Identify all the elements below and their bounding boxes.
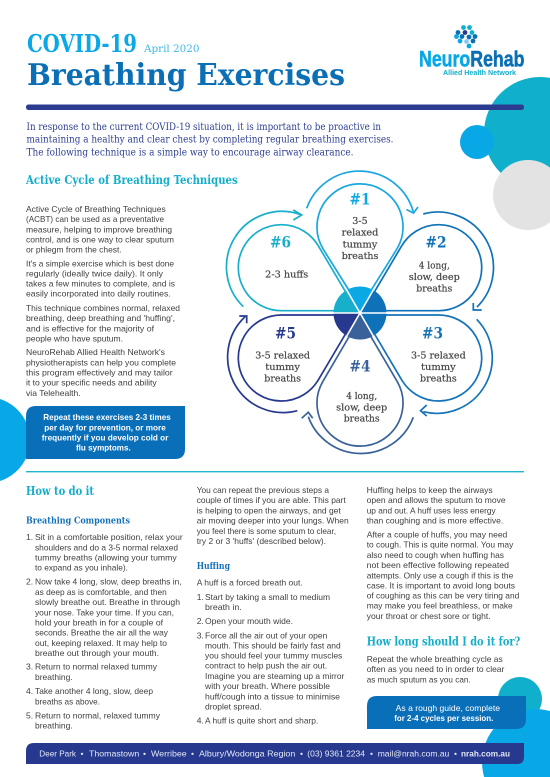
text block: repeat steps: You can repeat the previous steps a (197, 485, 329, 495)
petal 3 (363, 315, 482, 401)
list: huffing steps: Start by taking a small to medium (205, 592, 330, 602)
intro text: The following technique is a simple way to encourage airway clearance. (26, 146, 354, 158)
centre circle (333, 286, 387, 340)
list: huffing steps: 1. (197, 592, 204, 602)
petal 5: 3-5 relaxed (255, 350, 310, 361)
text block: huffing explanation: attempts. Only use a cough if this is the (367, 570, 514, 580)
petal 5: tummy (265, 362, 301, 373)
petal 2: #2 (426, 233, 446, 252)
text block: ACBT description (26, 204, 180, 398)
title: Breathing Exercises (27, 58, 345, 93)
petal 6 (238, 225, 357, 311)
text block: huffing explanation: of coughing as this can be very tiring and (367, 591, 520, 601)
footer bar: • (191, 749, 194, 759)
footer bar: (03) 9361 2234 (307, 749, 365, 759)
petal 4: breaths (344, 414, 380, 425)
petal 1: 3-5 (352, 216, 368, 227)
decorative circles: top right (460, 77, 550, 230)
list: breathing components: 1. (26, 532, 33, 542)
petal 1 (317, 184, 403, 308)
text block: repeat cycle: often as you need to in order to clear (367, 664, 504, 674)
text block: huffing explanation: also need to cough when huffing has (367, 550, 504, 560)
list: breathing components: Sit in a comfortable position, relax your (35, 532, 183, 542)
text block: repeat steps: air moving deeper into your lungs. When (197, 515, 349, 525)
arrow: 5 to 6 (228, 316, 297, 413)
list: huffing steps: 4. (197, 715, 204, 725)
title (27, 29, 345, 93)
intro text: maintaining a healthy and clear chest by completing regular breathing exercises. (26, 134, 394, 146)
petal 5: breaths (264, 374, 301, 385)
list: huffing steps: A huff is quite short and sharp. (205, 715, 318, 725)
decorative circles: bottom right (482, 677, 550, 777)
footer bar: Werribee (151, 749, 187, 759)
footer bar: nrah.com.au (461, 749, 510, 759)
title: COVID-19 (27, 29, 137, 58)
footer bar: Thomastown (89, 749, 140, 759)
heading: How to do it: How to do it (26, 483, 94, 498)
list: huffing steps: Imagine you are steaming up a mirror (205, 671, 344, 681)
petal 4 (317, 318, 403, 446)
text block: ACBT description: via Telehealth. (26, 388, 81, 398)
text block: huffing explanation: to cough. This is quite normal. You may (367, 540, 514, 550)
text block: ACBT description: This technique combines normal, relaxed (26, 303, 180, 313)
text block: ACBT description: measure, helping to improve breathing (26, 224, 172, 234)
text block: ACBT description: It's a simple exercise which is best done (26, 258, 174, 268)
intro text (26, 121, 394, 158)
heading: How long should I do it for?: How long should I do it for? (367, 634, 520, 648)
text block: repeat steps: try 2 or 3 'huffs' (described below). (197, 536, 326, 546)
list: breathing components: Return to normal relaxed tummy (35, 662, 158, 672)
text block: huffing explanation (367, 485, 520, 621)
list: breathing components: shoulders and do a 3-5 normal relaxed (35, 542, 178, 552)
callout: repeat exercises: frequently if you develop cold or (42, 432, 169, 442)
list: breathing components: breathe out through your mouth. (35, 648, 159, 658)
list: breathing components: your nose. Take your time. If you can, (35, 607, 174, 617)
header rule (26, 104, 524, 110)
text block: huffing explanation: Huffing helps to keep the airways (367, 485, 493, 495)
text block: ACBT description: or phlegm from the chest. (26, 244, 122, 254)
list: breathing components: Now take 4 long, slow, deep breaths in, (35, 577, 182, 587)
petal 5: #5 (275, 323, 296, 342)
diagram: breathing cycle (226, 171, 493, 454)
subheading: Breathing Components: Breathing Components (26, 515, 130, 526)
text block: ACBT description: NeuroRehab Allied Health Network's (26, 347, 165, 357)
text block: repeat steps (197, 485, 349, 546)
footer bar: • (370, 749, 373, 759)
petal 3: 3-5 relaxed (411, 350, 466, 361)
text block: huffing explanation: After a couple of huffs, you may need (367, 529, 508, 539)
text block: huffing explanation: may make you feel breathless, or make (367, 601, 513, 611)
petal 1: #1 (350, 189, 370, 208)
petal 2: slow, deep (409, 272, 460, 283)
callout: repeat exercises: flu symptoms. (76, 443, 131, 453)
heading: Active Cycle of Breathing Techniques: Active Cycle of Breathing Techniques (25, 172, 238, 187)
footer bar: • (454, 749, 457, 759)
petal 4: 4 long, (346, 391, 377, 402)
list: huffing steps: Open your mouth wide. (205, 616, 293, 626)
text block: ACBT description: this program effectively and may tailor (26, 368, 173, 378)
list: huffing steps: A huff is a forced breath out. (197, 578, 303, 588)
footer bar: • (143, 749, 146, 759)
callout: rough guide (367, 696, 526, 729)
list: huffing steps: huff/cough into a tissue to minimise (205, 691, 340, 701)
text block: huffing explanation: not been effective following repeated (367, 560, 509, 570)
list: breathing components: Take another 4 long, slow, deep (35, 686, 153, 696)
petal 4: slow, deep (336, 402, 387, 414)
petal 1: relaxed (342, 228, 378, 239)
intro text: In response to the current COVID-19 situation, it is important to be proactive in (26, 121, 381, 133)
list: breathing components: breathing. (35, 672, 73, 682)
text block: ACBT description: physiotherapists can help you complete (26, 357, 176, 367)
subheading: Huffing: Huffing (197, 561, 230, 572)
text block: ACBT description: and is effective for the majority of (26, 323, 155, 333)
list: huffing steps: with your breath. Where possible (204, 681, 330, 691)
text block: repeat steps: you feel there is some sputum to clear, (197, 526, 336, 536)
list: huffing steps: 3. (197, 630, 204, 640)
footer bar: Deer Park (39, 749, 77, 759)
text block: huffing explanation: open and allows the sputum to move (367, 495, 506, 505)
arrow: 3 to 4 (420, 319, 492, 416)
list: huffing steps: you should feel your tummy muscles (205, 651, 342, 661)
list: breathing components: slowly breathe out. Breathe in through (35, 597, 180, 607)
petal 4: #4 (350, 357, 370, 376)
petal 1: tummy (343, 239, 378, 250)
list: breathing components: breathing. (35, 721, 73, 731)
list: huffing steps: 2. (197, 616, 204, 626)
text block: ACBT description: regularly (ideally twice daily). It only (26, 268, 164, 278)
text block: ACBT description: Active Cycle of Breathing Techniques (26, 204, 166, 214)
text block: ACBT description: takes a few minutes to complete, and is (26, 278, 175, 288)
text block: ACBT description: people who have sputum. (26, 334, 123, 344)
text block: ACBT description: control, and is one way to clear sputum (26, 234, 174, 244)
footer bar (26, 743, 524, 764)
text block: ACBT description: easily incorporated into daily routines. (26, 289, 171, 299)
text block: huffing explanation: up and out. A huff uses less energy (367, 505, 496, 515)
petal 3: tummy (421, 362, 456, 373)
list: huffing steps: contract to help push the air out. (205, 661, 327, 671)
text block: repeat cycle (367, 654, 504, 684)
petal 2: breaths (416, 284, 452, 295)
footer bar: • (300, 749, 303, 759)
list: breathing components: to expand as you inhale). (35, 563, 128, 573)
list: breathing components: 4. (26, 686, 33, 696)
list: breathing components: as deep as is comfortable, and then (35, 587, 167, 597)
petal 2 (363, 225, 482, 311)
title: April 2020 (143, 43, 200, 55)
list: huffing steps (197, 578, 344, 725)
petal 6: #6 (270, 233, 291, 252)
text block: huffing explanation: your throat or chest sore or tight. (367, 611, 491, 621)
list: huffing steps: breath in. (205, 602, 242, 612)
list: huffing steps: Force all the air out of your open (205, 630, 328, 640)
footer bar: Albury/Wodonga Region (199, 749, 296, 759)
decorative circle: left (0, 397, 30, 483)
list: breathing components: seconds. Breathe the air all the way (35, 628, 169, 638)
callout: repeat exercises: Repeat these exercises 2-3 times (43, 412, 171, 422)
text block: repeat steps: couple of times if you are able. This part (197, 495, 346, 505)
petal 3: breaths (420, 374, 457, 385)
text block: huffing explanation: than coughing and is more effective. (367, 515, 503, 525)
logo: NeuroRehab (419, 25, 524, 77)
list: breathing components: Return to normal, relaxed tummy (35, 710, 161, 720)
text block: repeat cycle: Repeat the whole breathing cycle as (367, 654, 503, 664)
petal 6: 2-3 huffs (265, 270, 308, 281)
text block: repeat cycle: as much sputum as you can. (367, 674, 471, 684)
petal 5 (238, 315, 357, 401)
list: huffing steps: mouth. This should be fairly fast and (205, 640, 341, 650)
petal 3: #3 (422, 323, 443, 342)
footer bar: • (80, 749, 84, 759)
arrow: 2 to 3 (423, 212, 493, 310)
list: breathing components (26, 532, 183, 731)
arrow: 4 to 5 (302, 412, 413, 454)
icon: logo dots (454, 25, 477, 48)
list: breathing components: 3. (26, 662, 33, 672)
list: breathing components: out, keeping relaxed. It may help to (35, 638, 167, 648)
list: breathing components: 5. (26, 710, 33, 720)
callout: repeat exercises: per day for prevention, or more (44, 422, 166, 432)
footer bar: mail@nrah.com.au (378, 749, 450, 759)
list: breathing components: hold your breath in for a couple of (35, 618, 164, 628)
callout: rough guide: As a rough guide, complete (396, 703, 500, 713)
text block: huffing explanation: case. It is important to avoid long bouts (367, 580, 515, 590)
callout: repeat exercises (26, 406, 185, 459)
list: breathing components: breaths as above. (35, 696, 100, 706)
list: huffing steps: droplet spread. (205, 702, 262, 712)
arrow: 1 to 2 (307, 171, 418, 213)
section divider (26, 471, 524, 472)
text block: repeat steps: is helping to open the airways, and get (197, 505, 341, 515)
text block: ACBT description: it to your specific needs and ability (26, 378, 157, 388)
logo: NeuroRehab: Allied Health Network (443, 70, 516, 77)
petal 1: breaths (342, 251, 378, 262)
text block: ACBT description: breathing, deep breathing and 'huffing', (26, 313, 175, 323)
callout: rough guide: for 2-4 cycles per session. (394, 713, 493, 723)
arrow: 6 to 1 (226, 210, 302, 307)
petal 2: 4 long, (419, 260, 450, 271)
list: breathing components: tummy breaths (allowing your tummy (35, 552, 177, 562)
logo: NeuroRehab: NeuroRehab (419, 46, 524, 72)
text block: ACBT description: (ACBT) can be used as a preventative (26, 214, 164, 224)
list: breathing components: 2. (26, 577, 33, 587)
